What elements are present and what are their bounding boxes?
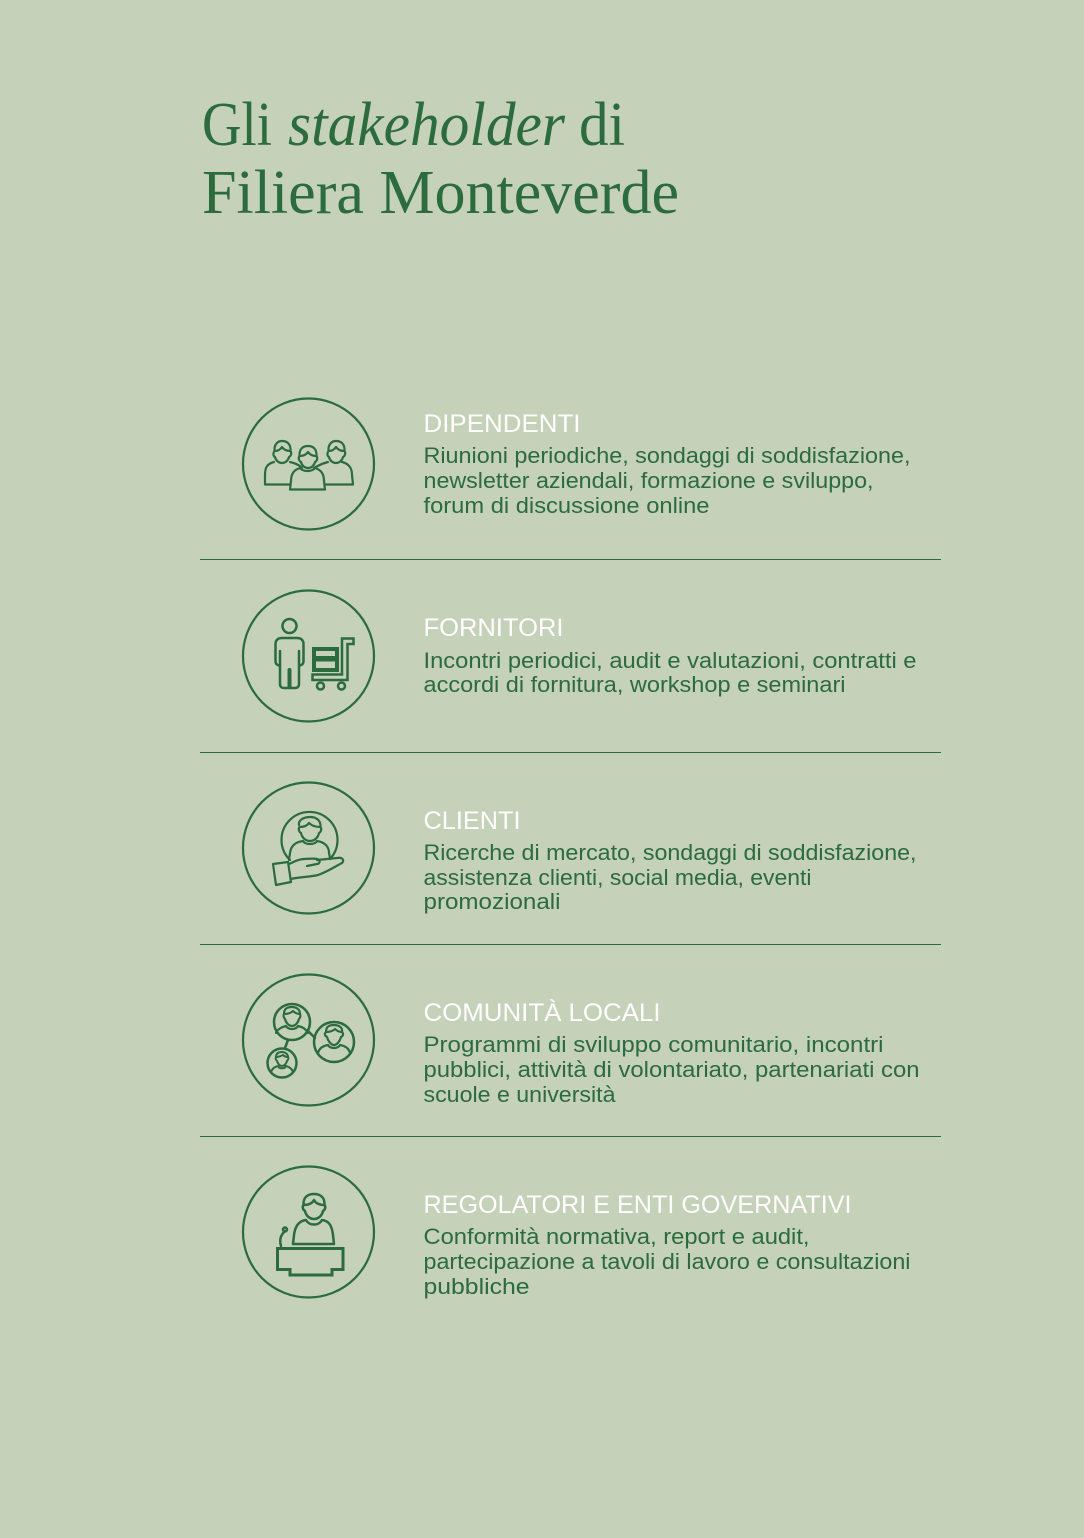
- title: di: [579, 91, 625, 159]
- text block: clienti: [424, 840, 916, 914]
- heading: regolatori e enti governativi: REGOLATORI E ENTI GOVERNATIVI: [424, 1191, 852, 1219]
- text block: regolatori e enti governativi: [424, 1224, 910, 1299]
- heading: clienti: CLIENTI: [424, 807, 520, 835]
- icon: regolatori e enti governativi: [243, 1166, 374, 1298]
- text block: comunità locali: [424, 1032, 920, 1107]
- text block: fornitori: [424, 648, 916, 697]
- text block: comunità locali: pubblici, attività di volontariato, partenariati con: [424, 1057, 920, 1082]
- text block: clienti: assistenza clienti, social media, eventi: [424, 865, 812, 890]
- heading: comunità locali: COMUNITÀ LOCALI: [424, 998, 660, 1027]
- text block: regolatori e enti governativi: Conformità normativa, report e audit,: [424, 1224, 810, 1249]
- title: stakeholder: [288, 91, 566, 159]
- text block: comunità locali: scuole e università: [424, 1082, 616, 1107]
- icon: clienti: [243, 782, 374, 914]
- title: Gli: [202, 91, 272, 159]
- heading: fornitori: FORNITORI: [424, 614, 564, 642]
- panel: comunità locali: [243, 974, 920, 1107]
- text block: regolatori e enti governativi: partecipazione a tavoli di lavoro e consultazioni: [424, 1249, 910, 1274]
- text block: regolatori e enti governativi: pubbliche: [424, 1274, 530, 1299]
- text block: comunità locali: Programmi di sviluppo comunitario, incontri: [424, 1032, 884, 1057]
- text block: dipendenti: [424, 443, 910, 518]
- text block: clienti: promozionali: [424, 889, 560, 914]
- panel: regolatori e enti governativi: [243, 1166, 910, 1299]
- panel: dipendenti: [243, 398, 910, 530]
- panel: fornitori: [243, 590, 916, 722]
- icon: comunità locali: [243, 974, 374, 1106]
- heading: dipendenti: DIPENDENTI: [424, 410, 580, 438]
- title: Filiera Monteverde: [202, 159, 679, 227]
- text block: fornitori: Incontri periodici, audit e valutazioni, contratti e: [424, 648, 916, 673]
- text block: dipendenti: Riunioni periodiche, sondaggi di soddisfazione,: [424, 443, 910, 468]
- icon: fornitori: [243, 590, 374, 722]
- icon: dipendenti: [243, 398, 374, 530]
- text block: fornitori: accordi di fornitura, workshop e seminari: [424, 672, 846, 697]
- title: [202, 91, 679, 227]
- panel: clienti: [243, 782, 916, 914]
- text block: clienti: Ricerche di mercato, sondaggi di soddisfazione,: [424, 840, 916, 865]
- text block: dipendenti: newsletter aziendali, formazione e sviluppo,: [424, 468, 874, 493]
- text block: dipendenti: forum di discussione online: [424, 493, 710, 518]
